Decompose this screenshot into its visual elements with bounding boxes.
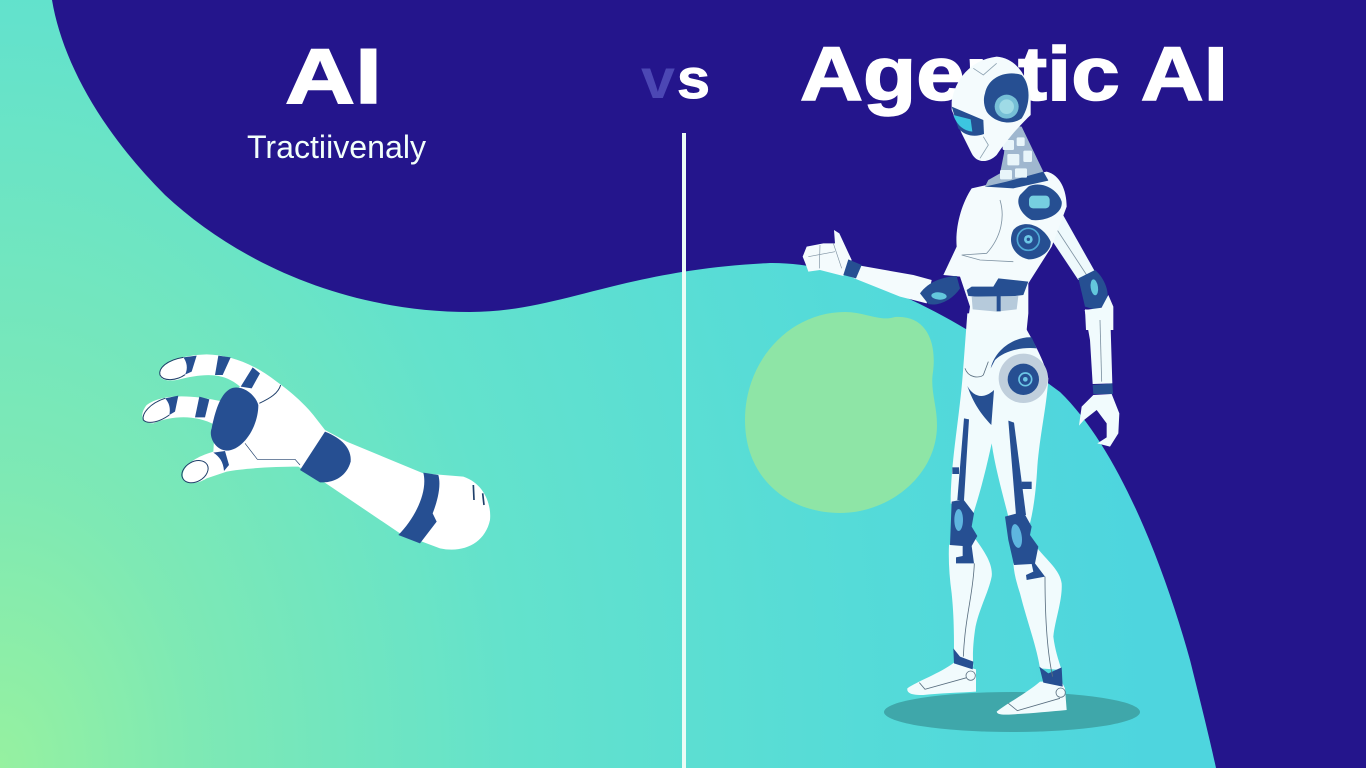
robot neck bbox=[985, 125, 1048, 188]
robotic arm bbox=[142, 354, 490, 550]
center divider bbox=[682, 133, 686, 768]
vs label bbox=[641, 47, 710, 110]
heading: Agentic AI: Agentic AI bbox=[800, 32, 1228, 117]
vs label: v bbox=[641, 47, 675, 110]
robot legs bbox=[907, 312, 1067, 715]
green blob bbox=[745, 312, 937, 513]
robot rear hand bbox=[1079, 307, 1119, 447]
vs label: s bbox=[677, 47, 710, 110]
robot back arm bbox=[1038, 207, 1113, 330]
robot front arm bbox=[803, 230, 960, 305]
robot shoulder joints bbox=[1011, 185, 1062, 259]
heading: AI: AI bbox=[285, 32, 382, 120]
agentic robot bbox=[803, 57, 1119, 715]
robot torso bbox=[943, 172, 1067, 330]
robot head bbox=[952, 57, 1031, 161]
subtitle: Tractiivenaly bbox=[247, 129, 426, 165]
robot head and torso bbox=[803, 57, 1113, 330]
ground shadow bbox=[884, 692, 1140, 732]
